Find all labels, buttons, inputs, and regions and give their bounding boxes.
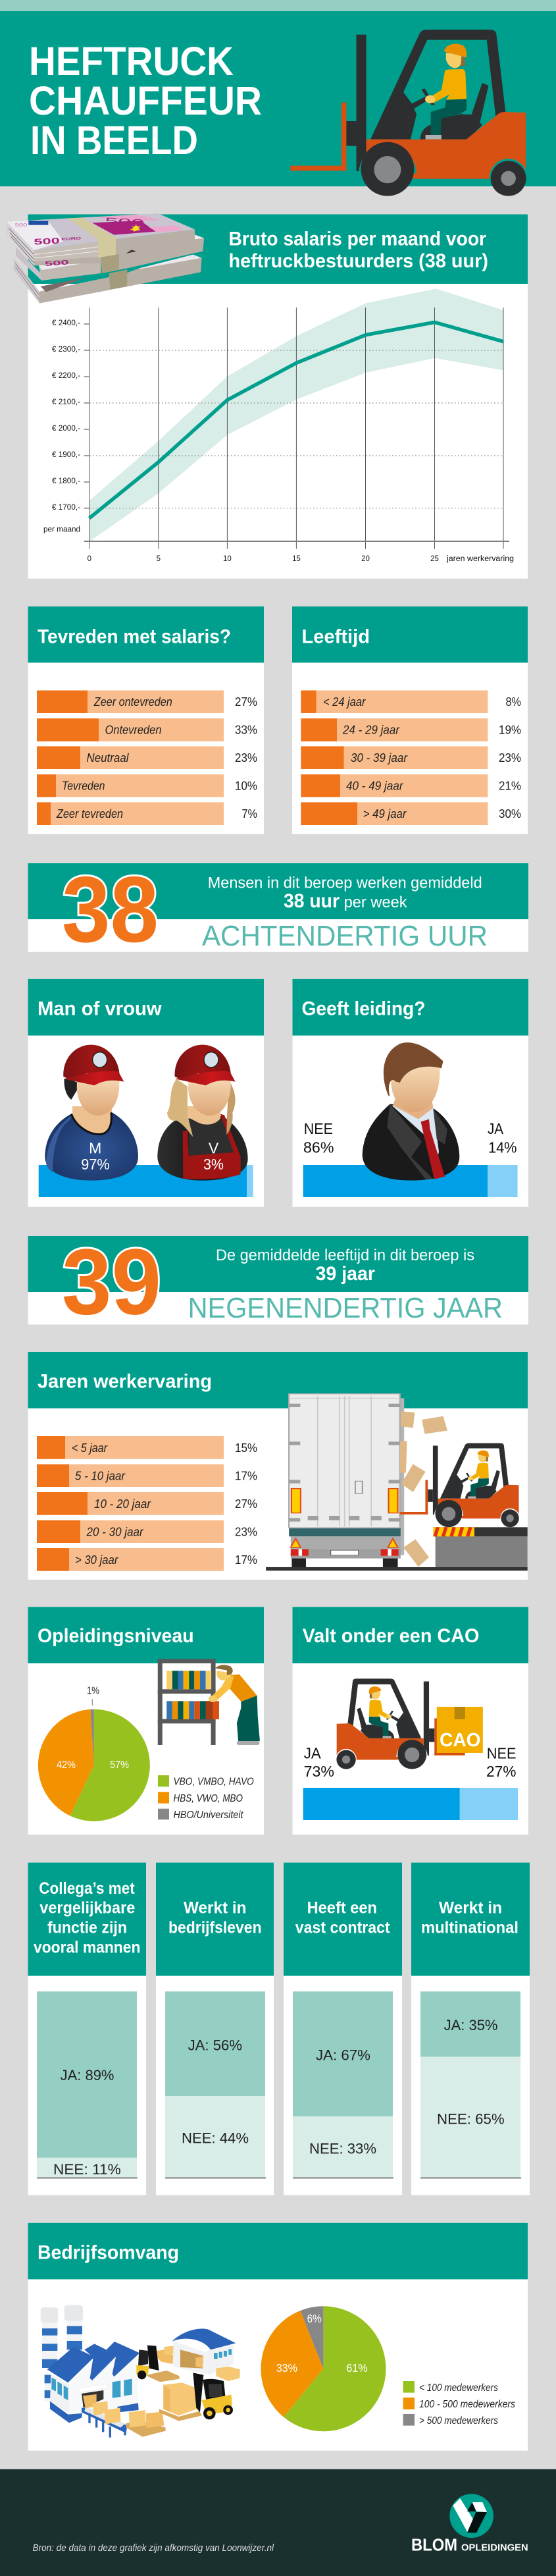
text: gemiddelde leeftijd <box>216 1247 474 1285</box>
label: M 97%: M <box>89 1140 101 1157</box>
panel: bedrijfsomvang <box>28 2223 528 2451</box>
y axis labels: € 2100,- <box>52 398 80 406</box>
pie chart: bedrijfsomvang <box>261 2306 386 2431</box>
heading: vast contract <box>295 1899 390 1937</box>
x axis labels: 5 <box>157 555 161 563</box>
panel: multinational <box>411 1863 530 2195</box>
panel: man of vrouw <box>28 979 264 1207</box>
heading: collega's: Collega’s met <box>39 1879 135 1898</box>
panel: collega's <box>28 1863 146 2195</box>
bar chart: tevreden: Zeer tevreden <box>56 807 123 820</box>
panel: geeft leiding <box>292 979 528 1207</box>
stacked bar: collega's: NEE: 11% <box>53 2161 121 2178</box>
bar chart: tevreden: 7% <box>242 807 257 820</box>
heading: opleidingsniveau: Opleidingsniveau <box>38 1625 194 1647</box>
big number 39: 39 <box>62 1230 161 1334</box>
label: JA 73%: JA <box>304 1745 321 1762</box>
bar chart: jaren werkervaring: 15% <box>235 1441 257 1455</box>
label: NEE 27%: NEE <box>487 1745 516 1762</box>
stacked bar: multinational: JA: 35% <box>444 2017 497 2033</box>
footer <box>0 2469 556 2576</box>
pie chart: opleidingsniveau: 1% <box>87 1686 99 1697</box>
bar chart: jaren werkervaring: 20 - 30 jaar <box>86 1525 143 1538</box>
legend: opleidingsniveau: HBO/Universiteit <box>174 1810 243 1821</box>
label: M 97%: 97% <box>81 1156 110 1173</box>
y axis labels: € 2000,- <box>52 425 80 433</box>
label: NEE 86%: 86% <box>303 1139 334 1156</box>
x axis labels: 10 <box>223 555 232 563</box>
heading: salary: Bruto salaris per maand voor <box>229 228 486 250</box>
icon: woman with cap <box>157 1045 248 1181</box>
pie chart: opleidingsniveau: 57% <box>110 1759 129 1771</box>
bar chart: leeftijd: < 24 jaar <box>323 695 366 709</box>
panel: jaren werkervaring <box>28 1352 528 1580</box>
heading: bedrijfsleven: Werkt in <box>184 1899 246 1918</box>
illustration: worker at shelf <box>158 1659 260 1745</box>
bar chart: jaren werkervaring: > 30 jaar <box>75 1553 118 1567</box>
line chart: salary by years of experience <box>43 288 514 563</box>
icon: stacks of 500 euro notes: 500 <box>15 222 27 228</box>
text: cao on box: CAO <box>440 1730 481 1751</box>
heading: bedrijfsleven <box>168 1899 262 1937</box>
bar chart: jaren werkervaring: 27% <box>235 1497 257 1511</box>
label: V 3% <box>203 1140 224 1173</box>
label: JA 73%: 73% <box>304 1763 334 1780</box>
icon: stacks of 500 euro notes: EURO <box>61 236 81 242</box>
logo: blom opleidingen: BLOM <box>411 2535 457 2554</box>
bar chart: jaren werkervaring: 5 - 10 jaar <box>75 1468 126 1483</box>
bar chart: leeftijd: 23% <box>499 751 521 765</box>
text: werkweek: Mensen in dit beroep werken gemiddeld <box>208 874 482 892</box>
legend: bedrijfsomvang: > 500 medewerkers <box>419 2415 498 2427</box>
logo: blom opleidingen: OPLEIDINGEN <box>461 2542 528 2553</box>
y axis labels: € 1700,- <box>52 504 80 512</box>
heading: vast contract: Heeft een <box>307 1899 377 1918</box>
bar chart: leeftijd: 8% <box>505 695 521 709</box>
pie chart: bedrijfsomvang: 33% <box>276 2361 297 2375</box>
banner: 39 jaar <box>28 1230 528 1334</box>
pie chart: opleidingsniveau <box>38 1686 150 1821</box>
heading: bedrijfsomvang: Bedrijfsomvang <box>38 2241 179 2263</box>
legend: bedrijfsomvang: < 100 medewerkers <box>419 2382 498 2394</box>
heading: collega's: functie zijn <box>47 1919 127 1937</box>
heading: man of vrouw: Man of vrouw <box>38 998 162 1020</box>
bar chart: jaren werkervaring: 23% <box>235 1525 257 1538</box>
bar: man vs vrouw <box>39 1165 253 1197</box>
illustration: forklift with cao box <box>336 1678 483 1769</box>
icon: forklift with driver <box>290 30 528 196</box>
pie chart: opleidingsniveau: 42% <box>57 1759 76 1771</box>
heading: vast contract: vast contract <box>295 1919 390 1937</box>
stacked bar: collega's <box>37 1991 138 2178</box>
legend: bedrijfsomvang: 100 - 500 medewerkers <box>419 2399 515 2410</box>
legend: opleidingsniveau: HBS, VWO, MBO <box>174 1793 243 1804</box>
panel: vast contract <box>284 1863 402 2195</box>
y axis labels: per maand <box>43 526 80 534</box>
icon: stacks of 500 euro notes: 500 <box>105 215 145 228</box>
bar chart: tevreden: 10% <box>235 778 257 793</box>
heading: collega's: vooral mannen <box>34 1939 140 1957</box>
heading: collega's <box>34 1879 140 1957</box>
label: NEE 27%: 27% <box>486 1763 516 1780</box>
heading: bedrijfsleven: bedrijfsleven <box>168 1919 262 1937</box>
y axis labels: € 2300,- <box>52 346 80 354</box>
bar chart: tevreden: Zeer ontevreden <box>93 695 172 709</box>
stacked bar: vast contract <box>293 1991 393 2178</box>
x axis labels: 0 <box>88 555 91 563</box>
heading: collega's: vergelijkbare <box>39 1899 135 1918</box>
panel: werkt in bedrijfsleven <box>156 1863 274 2195</box>
pie chart: bedrijfsomvang: 6% <box>307 2312 322 2325</box>
label: JA 73% <box>304 1745 334 1780</box>
logo: blom opleidingen <box>411 2494 528 2554</box>
icon: stacks of 500 euro notes: 500 <box>34 236 60 247</box>
icon: manager in suit <box>363 1042 459 1181</box>
title: HEFTRUCK <box>29 39 234 84</box>
heading: geeft leiding: Geeft leiding? <box>301 998 425 1020</box>
icon: man with cap <box>45 1045 138 1181</box>
x axis labels: 25 <box>430 555 439 563</box>
bar: ja vs nee <box>303 1165 518 1197</box>
text: gemiddelde leeftijd: De gemiddelde leeftijd in dit beroep is <box>216 1247 474 1264</box>
bar chart: tevreden <box>37 690 257 825</box>
bar chart: tevreden: 33% <box>235 723 257 736</box>
label: NEE 86% <box>303 1120 334 1156</box>
panel: opleidingsniveau <box>28 1607 264 1835</box>
heading: cao: Valt onder een CAO <box>303 1625 479 1647</box>
banner: 38 uur <box>28 857 528 962</box>
text: werkweek: per week <box>344 894 408 911</box>
y axis labels: € 1800,- <box>52 477 80 485</box>
pie chart: bedrijfsomvang: 61% <box>346 2361 368 2375</box>
source note: Bron: de data in deze grafiek zijn afkomstig van Loonwijzer.nl <box>33 2542 274 2554</box>
illustration: factory and warehouse <box>41 2305 240 2438</box>
stacked bar: bedrijfsleven: JA: 56% <box>188 2037 242 2054</box>
stacked bar: multinational: NEE: 65% <box>437 2110 505 2127</box>
heading: multinational: multinational <box>421 1919 518 1937</box>
label: NEE 86%: NEE <box>304 1120 333 1137</box>
text: negenendertig jaar: NEGENENDERTIG JAAR <box>188 1292 503 1324</box>
bar chart: jaren werkervaring: 17% <box>235 1468 257 1483</box>
icon: stacks of 500 euro notes: 500 <box>45 259 70 268</box>
legend: bedrijfsomvang <box>403 2381 515 2427</box>
stacked bar: multinational <box>420 1991 521 2178</box>
bar chart: leeftijd: > 49 jaar <box>363 807 407 820</box>
title <box>29 39 262 163</box>
title: CHAUFFEUR <box>29 78 262 123</box>
text: werkweek: 38 uur <box>284 890 340 912</box>
bar chart: leeftijd: 21% <box>499 778 521 793</box>
stacked bar: bedrijfsleven <box>165 1991 266 2178</box>
bar chart: jaren werkervaring: < 5 jaar <box>72 1441 108 1455</box>
text: gemiddelde leeftijd: 39 jaar <box>316 1263 375 1285</box>
title: IN BEELD <box>30 118 198 163</box>
y axis labels: € 2200,- <box>52 372 80 380</box>
x axis labels: jaren werkervaring <box>446 555 514 563</box>
x axis labels: 15 <box>292 555 301 563</box>
stacked bar: bedrijfsleven: NEE: 44% <box>182 2130 249 2147</box>
bar chart: leeftijd: 30 - 39 jaar <box>351 751 408 765</box>
heading: tevreden: Tevreden met salaris? <box>38 626 231 648</box>
bar chart: leeftijd: 40 - 49 jaar <box>346 778 403 793</box>
panel: valt onder een cao <box>292 1607 528 1835</box>
stacked bar: collega's: JA: 89% <box>61 2067 114 2083</box>
label: JA 14%: 14% <box>488 1139 517 1156</box>
y axis labels: € 1900,- <box>52 451 80 459</box>
label: JA 14% <box>488 1120 517 1156</box>
panel: leeftijd <box>292 606 528 834</box>
bar chart: leeftijd: 24 - 29 jaar <box>342 723 400 736</box>
bar: cao ja vs nee <box>303 1788 518 1820</box>
heading: salary <box>229 228 488 272</box>
bar chart: tevreden: Ontevreden <box>105 723 162 736</box>
heading: multinational <box>421 1899 518 1937</box>
y axis labels <box>43 319 80 534</box>
y axis labels: € 2400,- <box>52 319 80 327</box>
x axis labels <box>88 555 514 563</box>
panel: salary chart <box>7 213 528 579</box>
text: achtendertig uur: ACHTENDERTIG UUR <box>202 920 488 952</box>
bar chart: tevreden: 23% <box>235 751 257 765</box>
panel: tevreden met salaris <box>28 606 264 834</box>
legend: opleidingsniveau <box>158 1775 254 1821</box>
label: NEE 27% <box>486 1745 516 1780</box>
bar chart: tevreden: Neutraal <box>87 751 129 765</box>
heading: jaren werkervaring: Jaren werkervaring <box>38 1371 212 1393</box>
label: V 3%: V <box>209 1140 219 1157</box>
bar chart: tevreden: Tevreden <box>62 778 105 793</box>
bar chart: leeftijd <box>301 690 521 825</box>
bar chart: jaren werkervaring <box>37 1436 257 1571</box>
bar chart: leeftijd: 19% <box>499 723 521 736</box>
bar chart: leeftijd: 30% <box>499 807 521 820</box>
stacked bar: vast contract: NEE: 33% <box>309 2141 376 2157</box>
heading: leeftijd: Leeftijd <box>301 626 370 648</box>
label: V 3%: 3% <box>203 1156 224 1173</box>
bar chart: jaren werkervaring: 10 - 20 jaar <box>94 1497 151 1511</box>
stacked bar: vast contract: JA: 67% <box>316 2047 370 2064</box>
heading: multinational: Werkt in <box>439 1899 502 1918</box>
icon: stacks of 500 euro notes <box>7 213 204 304</box>
bar chart: tevreden: 27% <box>235 695 257 709</box>
label: M 97% <box>81 1140 110 1173</box>
illustration: truck, loading dock and forklift <box>266 1394 528 1570</box>
bar chart: jaren werkervaring: 17% <box>235 1553 257 1567</box>
header <box>0 0 556 196</box>
x axis labels: 20 <box>361 555 370 563</box>
big number 38: 38 <box>62 857 159 962</box>
text: werkweek <box>208 874 482 912</box>
legend: opleidingsniveau: VBO, VMBO, HAVO <box>174 1777 254 1788</box>
heading: salary: heftruckbestuurders (38 uur) <box>229 250 488 272</box>
label: JA 14%: JA <box>488 1120 504 1137</box>
